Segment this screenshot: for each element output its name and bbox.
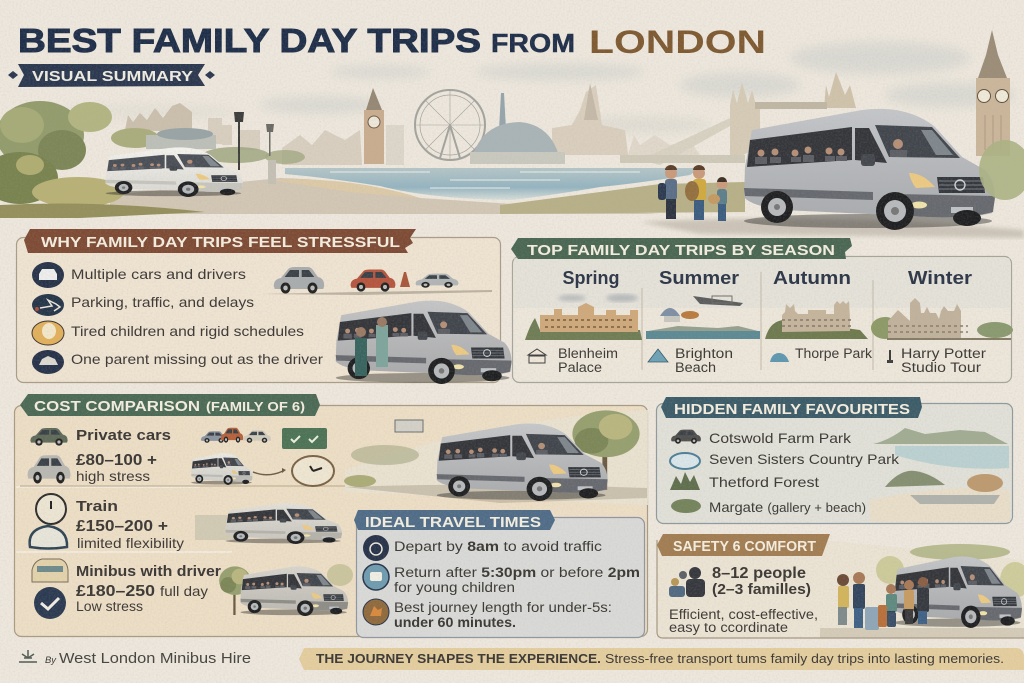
- grey minibus: [744, 109, 995, 230]
- summer column: [646, 268, 760, 375]
- row: private cars: high stress: [76, 468, 150, 484]
- footer takeaway banner: THE JOURNEY SHAPES THE EXPERIENCE.: [316, 652, 601, 666]
- footer takeaway banner: [299, 648, 1024, 670]
- panel: why family day trips feel stressful: [16, 229, 512, 384]
- brand credit: West London Minibus Hire: [59, 651, 251, 667]
- dome: [470, 122, 565, 164]
- white minibus: [106, 147, 243, 197]
- panel: hidden family favourites: [656, 397, 1012, 524]
- benefit text: easy to ccordinate: [669, 620, 788, 635]
- item: return: Return after 5:30pm or before 2pm: [394, 565, 640, 580]
- spring column: Blenheim: [558, 346, 618, 361]
- footer takeaway banner: Stress-free transport tums family day trips into lasting memories.: [605, 652, 1004, 666]
- big ben left: [364, 88, 384, 164]
- spring column: Palace: [558, 360, 602, 375]
- scene: families with luggage beside minibus: [820, 544, 1024, 638]
- autumn column: [765, 268, 872, 362]
- item: thetford: [670, 472, 819, 490]
- sand and road: [110, 178, 1024, 238]
- row: private cars: Private cars: [76, 428, 171, 444]
- item: cotswold: Cotswold Farm Park: [709, 430, 852, 446]
- heading ribbon: (FAMILY OF 6): [206, 399, 305, 414]
- row: train: [30, 494, 342, 551]
- item: depart: [363, 535, 602, 561]
- item: parking: Parking, traffic, and delays: [71, 294, 254, 310]
- row: train: limited flexibility: [77, 535, 184, 551]
- row: private cars: [20, 428, 345, 486]
- museum building: [146, 128, 216, 149]
- item: one parent driving: [32, 350, 323, 374]
- row: minibus with driver: Low stress: [76, 599, 143, 614]
- heading ribbon: HIDDEN FAMILY FAVOURITES: [674, 401, 910, 418]
- heading ribbon: [661, 397, 922, 418]
- distant skyline silhouettes: [125, 83, 700, 165]
- brand credit: By: [45, 655, 57, 665]
- bush right: [979, 140, 1024, 200]
- item: tired children: Tired children and rigid schedules: [71, 323, 304, 339]
- row: private cars: £80–100 +: [76, 452, 157, 469]
- left trees: [0, 101, 305, 218]
- stat: group size: 8–12 people: [712, 565, 806, 582]
- item: multiple cars: Multiple cars and drivers: [71, 266, 246, 282]
- item: thetford: Thetford Forest: [709, 474, 819, 490]
- winter column: [871, 268, 1013, 375]
- brand credit: [19, 650, 251, 667]
- spring column: Spring: [562, 268, 620, 288]
- item: journey length: [363, 599, 612, 630]
- children walking: [658, 165, 728, 221]
- london eye: [415, 90, 485, 160]
- item: seven sisters: [670, 451, 900, 469]
- summer column: Brighton: [675, 346, 733, 361]
- title: BEST FAMILY DAY TRIPS: [18, 22, 481, 59]
- spring column: [525, 268, 642, 375]
- item: parking: [32, 294, 254, 316]
- summer column: Summer: [659, 268, 739, 288]
- illustration: London skyline banner: [0, 30, 1024, 238]
- winter column: Studio Tour: [901, 360, 982, 375]
- item: depart: Depart by 8am to avoid traffic: [394, 539, 602, 554]
- row: minibus with driver: Minibus with driver: [76, 564, 221, 580]
- heading ribbon: [24, 229, 416, 253]
- big ben right: [976, 30, 1010, 156]
- stat: group size: [712, 565, 811, 598]
- heading ribbon: COST COMPARISON: [34, 398, 200, 415]
- coastal scene: [870, 428, 1010, 522]
- column dividers: [642, 272, 873, 370]
- title: FROM: [491, 28, 575, 58]
- title: LONDON: [589, 24, 766, 60]
- heading ribbon: TOP FAMILY DAY TRIPS BY SEASON: [527, 242, 835, 259]
- panel: top family day trips by season: [511, 238, 1013, 382]
- item: one parent driving: One parent missing out as the driver: [71, 351, 323, 367]
- row: minibus with driver: full day: [160, 583, 208, 599]
- river: [285, 168, 700, 200]
- row: minibus with driver: £180–250: [76, 583, 155, 600]
- ribbon: visual summary: [8, 64, 215, 87]
- item: return: for young children: [394, 580, 515, 595]
- title: [18, 22, 766, 60]
- lamp posts: [234, 112, 274, 170]
- winter column: Harry Potter: [901, 346, 987, 361]
- cars in traffic: [262, 267, 492, 295]
- autumn column: Thorpe Park: [795, 346, 872, 361]
- icon: family group: [669, 567, 705, 597]
- item: cotswold: [671, 430, 852, 446]
- ribbon: visual summary: VISUAL SUMMARY: [32, 68, 193, 85]
- stat: group size: (2–3 familles): [712, 581, 811, 598]
- panel: ideal travel times: [354, 510, 644, 638]
- panel: cost comparison: [14, 394, 648, 636]
- row: train: £150–200 +: [76, 518, 168, 535]
- item: margate: Margate (gallery + beach): [709, 499, 866, 515]
- item: seven sisters: Seven Sisters Country Park: [709, 451, 900, 467]
- summer column: Beach: [675, 360, 716, 375]
- heading ribbon: WHY FAMILY DAY TRIPS FEEL STRESSFUL: [41, 234, 400, 251]
- tower bridge: [620, 72, 856, 165]
- heading ribbon: [511, 238, 852, 259]
- item: tired children: [32, 321, 304, 345]
- minibus with family boarding: [336, 301, 512, 384]
- heading ribbon: IDEAL TRAVEL TIMES: [365, 514, 541, 531]
- item: journey length: Best journey length for under-5s:: [394, 600, 612, 615]
- winter column: Winter: [908, 268, 972, 288]
- autumn column: Autumn: [773, 268, 851, 288]
- scene: minibus on country road: [344, 410, 648, 505]
- benefit text: Efficient, cost-effective,: [669, 607, 818, 622]
- row: minibus with driver: [32, 559, 353, 619]
- benefit text: [669, 607, 818, 635]
- heading ribbon: [657, 534, 830, 556]
- item: return: [363, 564, 640, 595]
- heading ribbon: [20, 394, 320, 416]
- row: train: Train: [76, 499, 118, 515]
- heading ribbon: SAFETY 6 COMFORT: [673, 539, 816, 555]
- panel: safety and comfort: [657, 534, 1024, 638]
- heading ribbon: [354, 510, 555, 531]
- item: journey length: under 60 minutes.: [394, 615, 516, 630]
- item: multiple cars: [32, 262, 246, 288]
